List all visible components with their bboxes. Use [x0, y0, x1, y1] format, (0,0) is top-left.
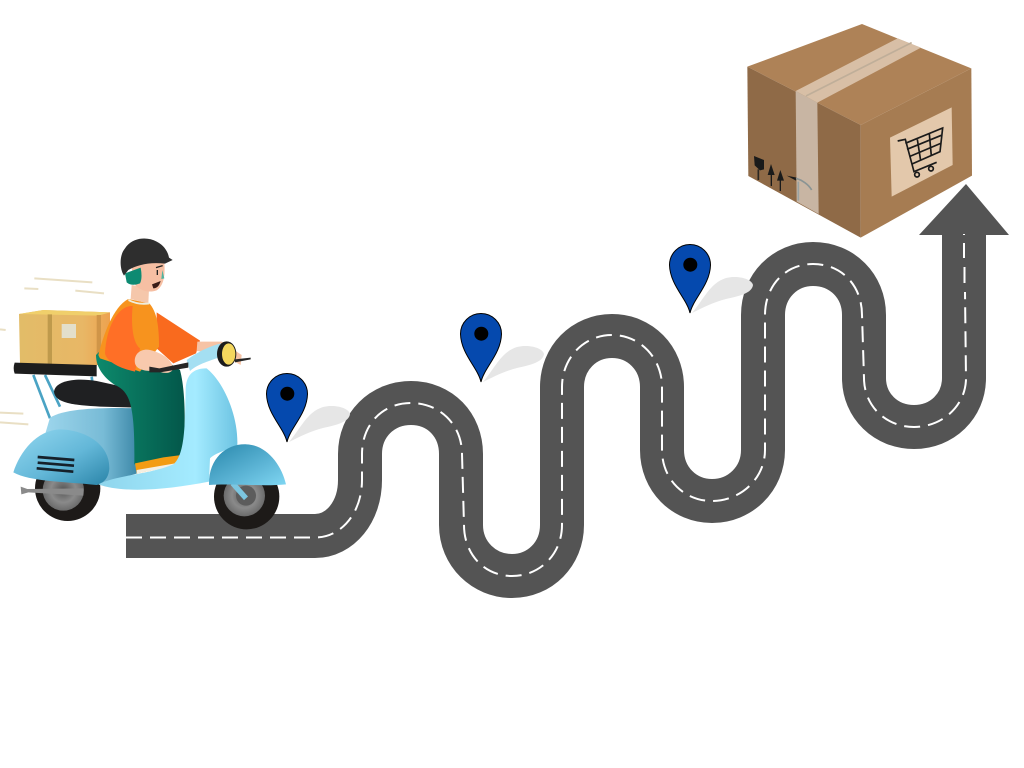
far hand — [197, 342, 242, 365]
road centre dashes — [126, 264, 966, 576]
shipping label — [890, 107, 953, 197]
rear fender — [13, 429, 109, 485]
torso — [98, 299, 159, 372]
helmet — [121, 238, 173, 276]
arrow stem dashes — [963, 234, 966, 283]
ear cup — [125, 268, 142, 285]
near arm — [105, 306, 140, 372]
vent grille — [37, 457, 74, 472]
arrow head — [919, 184, 1009, 235]
scooter rear body — [40, 408, 137, 485]
seat — [54, 380, 137, 408]
front fender — [209, 444, 286, 485]
box right face — [861, 68, 972, 238]
pin dot — [474, 327, 488, 341]
pin body — [670, 244, 710, 313]
pin shadow — [692, 277, 753, 313]
pin body — [266, 373, 308, 442]
pin shadow — [483, 346, 544, 382]
pin shadow — [289, 406, 350, 442]
near hand — [135, 350, 173, 373]
rack platform — [14, 363, 97, 376]
road surface — [126, 230, 964, 576]
delivery rider on scooter — [0, 238, 286, 529]
pin dot — [280, 387, 294, 401]
exhaust — [21, 487, 83, 496]
front wheel — [214, 464, 279, 529]
cardboard box destination — [747, 24, 972, 238]
rack struts — [33, 375, 93, 418]
icon: shopping cart — [898, 128, 943, 177]
handlebar — [149, 343, 251, 372]
handling icons — [754, 156, 812, 201]
winding road with arrow — [126, 184, 1009, 576]
delivery parcel on rack — [19, 310, 110, 366]
face details — [152, 266, 164, 288]
shoe — [135, 455, 182, 473]
map pin 1 — [266, 373, 350, 442]
map pin 3 — [670, 244, 753, 313]
neck and collar — [128, 285, 149, 305]
packing tape — [796, 38, 921, 214]
person legs — [96, 348, 185, 464]
far arm — [157, 312, 200, 363]
head — [132, 260, 165, 292]
box left face — [747, 67, 861, 238]
box top face — [747, 24, 971, 125]
speed lines — [0, 278, 104, 424]
leg shield and footboard — [98, 368, 237, 490]
map pin 2 — [460, 313, 544, 382]
headlight — [217, 341, 236, 367]
pin dot — [683, 258, 697, 272]
rear wheel — [35, 456, 100, 521]
pin body — [460, 313, 502, 382]
